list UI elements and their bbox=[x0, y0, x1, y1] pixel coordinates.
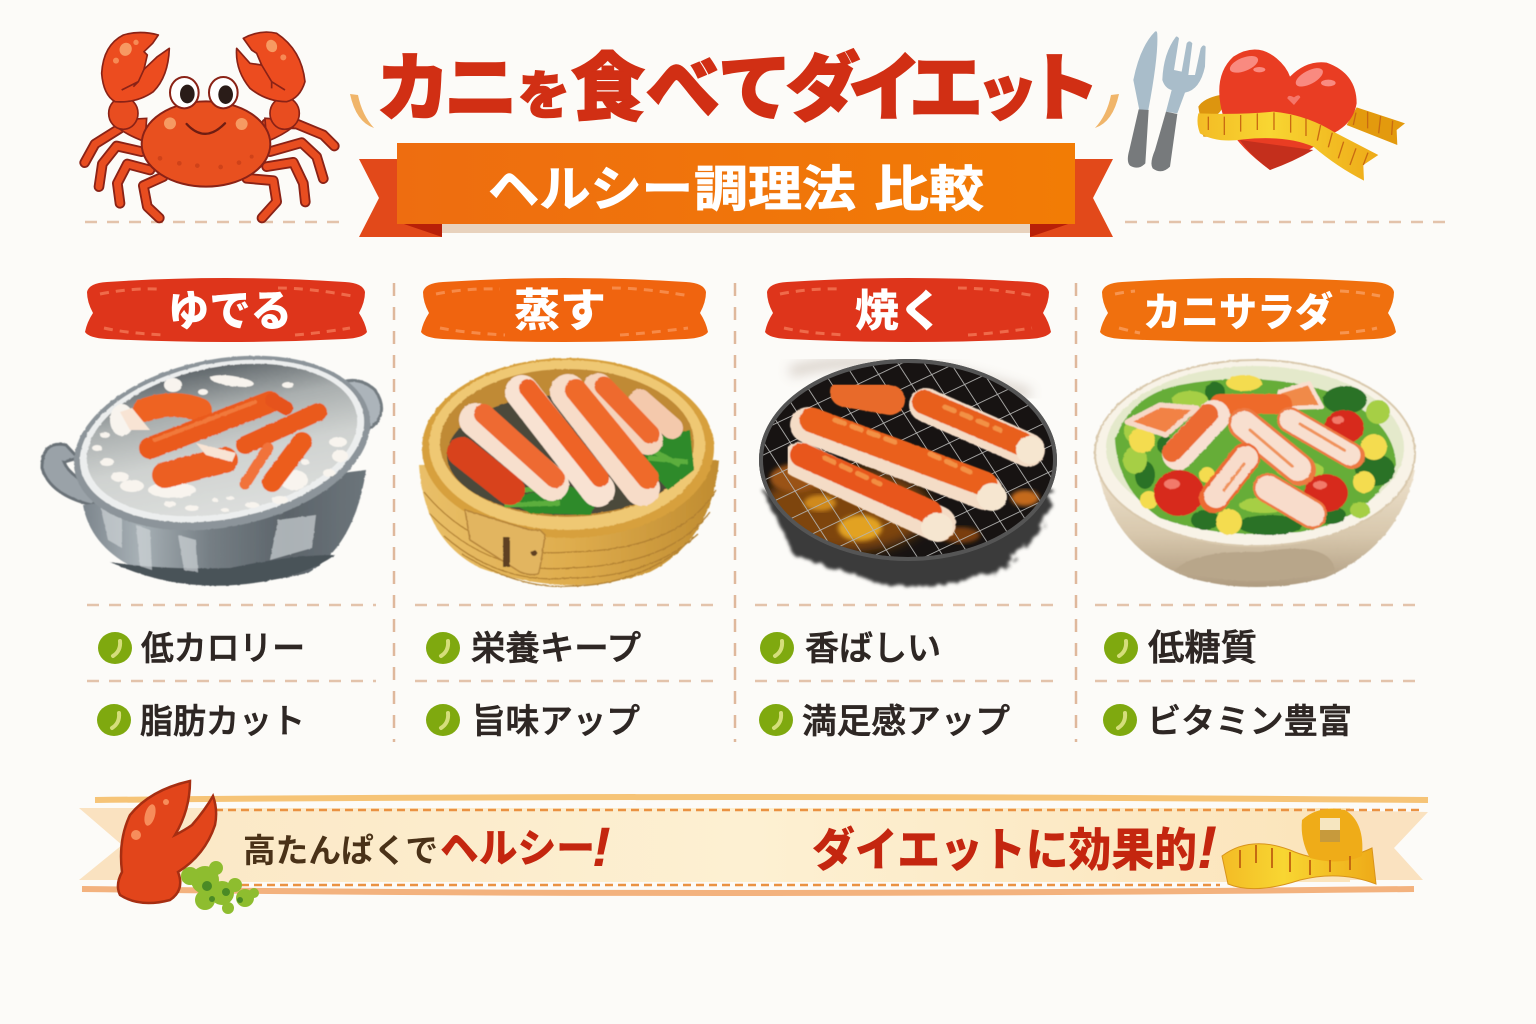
label ribbon: カニサラダ: カニサラダ bbox=[1143, 290, 1333, 335]
icon: parsley bbox=[181, 861, 259, 914]
label ribbon: カニサラダ bbox=[1100, 278, 1396, 342]
column 2: steaming bbox=[419, 278, 719, 741]
illustration: boiling pot with crab legs bbox=[42, 332, 385, 586]
illustration: bamboo steamer with crab legs bbox=[419, 358, 719, 586]
text: diet message: ! bbox=[1197, 814, 1217, 881]
bottom banner bbox=[79, 781, 1428, 914]
text: protein message: ヘルシー bbox=[440, 827, 595, 871]
text: diet message: ダイエットに効果的 bbox=[812, 824, 1197, 876]
title: ダイエ bbox=[786, 47, 983, 130]
ribbon banner: subtitle bbox=[359, 143, 1113, 237]
title: カニ bbox=[376, 47, 518, 130]
icon: heart with measuring tape bbox=[1197, 50, 1405, 181]
infographic canvas bbox=[40, 31, 1445, 914]
subtitle text: 調理法 bbox=[694, 163, 856, 217]
benefit: 栄養キープ: 栄養キープ bbox=[471, 630, 641, 668]
label ribbon: 蒸す bbox=[421, 278, 708, 342]
column 3: grilling bbox=[750, 278, 1070, 741]
illustration: charcoal grill with crab legs bbox=[750, 350, 1070, 586]
icon: crab claw bbox=[118, 781, 216, 903]
benefit: 脂肪カット: 脂肪カット bbox=[140, 703, 305, 741]
benefit: 香ばしい: 香ばしい bbox=[805, 630, 941, 668]
title: を bbox=[518, 68, 570, 126]
title: ト bbox=[1026, 47, 1100, 130]
label ribbon: ゆでる: ゆでる bbox=[168, 288, 292, 336]
benefit: 旨味アップ: 旨味アップ bbox=[472, 703, 640, 741]
benefit: 低カロリー: 低カロリー bbox=[141, 630, 305, 668]
label ribbon: ゆでる bbox=[85, 278, 367, 342]
icon: knife and fork bbox=[1128, 31, 1206, 171]
icon: smiling red crab bbox=[85, 32, 334, 218]
benefit: 低糖質: 低糖質 bbox=[1148, 627, 1257, 668]
subtitle text: ヘルシー bbox=[488, 163, 693, 217]
text: protein message: ! bbox=[592, 815, 611, 878]
text: protein message: 高たんぱくで bbox=[243, 832, 438, 869]
label ribbon: 焼く bbox=[765, 278, 1051, 342]
label ribbon: 蒸す: 蒸す bbox=[514, 285, 606, 336]
benefit: 満足感アップ: 満足感アップ bbox=[802, 703, 1010, 741]
title: ッ bbox=[976, 59, 1038, 128]
title: 食べて bbox=[571, 47, 792, 130]
label ribbon: 焼く: 焼く bbox=[855, 287, 943, 336]
decorative title brackets bbox=[350, 94, 1119, 128]
column 4: crab salad bbox=[1095, 278, 1415, 741]
illustration: salad bowl with crab sticks bbox=[1095, 360, 1415, 587]
icon: measuring tape roll bbox=[1222, 809, 1376, 889]
column 1: boiling bbox=[42, 278, 385, 741]
subtitle text: 比較 bbox=[874, 163, 984, 217]
benefit: ビタミン豊富: ビタミン豊富 bbox=[1147, 703, 1352, 741]
